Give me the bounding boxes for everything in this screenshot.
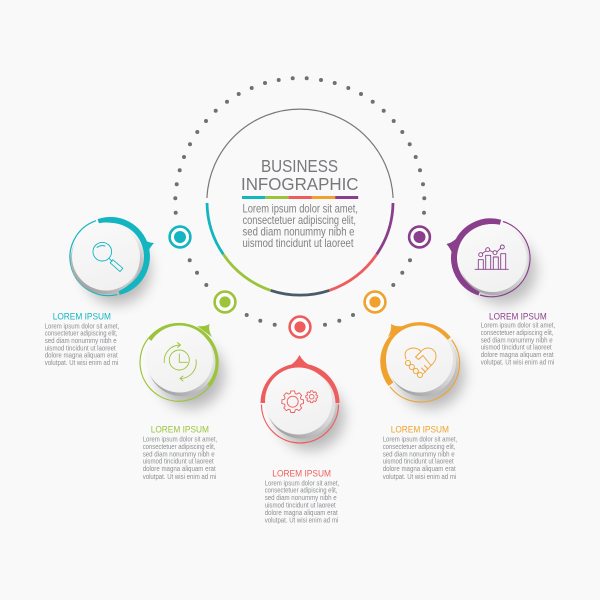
label: orange: uismod tincidunt ut laoreet [383,457,454,466]
card: teal search [70,220,154,304]
title [241,156,358,194]
label: teal: LOREM IPSUM [53,311,111,322]
label: green: Lorem ipsum dolor sit amet, [143,435,217,444]
label: red: uismod tincidunt ut laoreet [265,501,336,510]
label: orange: sed diam nonummy nibh e [383,449,455,458]
central text: consectetuer adipiscing elit, [242,213,356,227]
label: green: consectetuer adipiscing elit, [143,442,215,451]
label: red: dolore magna aliquam erat [265,508,338,517]
node: teal [170,227,190,247]
label: green: volutpat. Ut wisi enim ad mi [143,472,217,481]
node: red [290,317,310,337]
label: teal: Lorem ipsum dolor sit amet, [45,321,119,330]
label: green: uismod tincidunt ut laoreet [143,457,214,466]
label: purple: dolore magna aliquam erat [481,350,554,359]
label: green [143,425,217,481]
label: green: LOREM IPSUM [151,425,209,436]
title: BUSINESS [261,156,338,176]
label: red: consectetuer adipiscing elit, [265,486,337,495]
label: teal: volutpat. Ut wisi enim ad mi [45,358,119,367]
icon: handshake [405,348,436,378]
node: purple [409,227,430,247]
colour bar [242,196,358,199]
card: orange handshake [383,324,464,408]
label: purple: consectetuer adipiscing elit, [481,328,553,337]
title: INFOGRAPHIC [241,174,358,194]
card: red gears [262,355,344,450]
label: red: sed diam nonummy nibh e [265,493,337,502]
card: green clock [140,324,224,408]
icon: gears [282,391,318,413]
central text [242,202,358,250]
label: orange: volutpat. Ut wisi enim ad mi [383,472,457,481]
label: red: Lorem ipsum dolor sit amet, [265,478,339,487]
label: teal: consectetuer adipiscing elit, [45,329,117,338]
label: green: dolore magna aliquam erat [143,464,216,473]
label: purple: uismod tincidunt ut laoreet [481,343,552,352]
label: teal: uismod tincidunt ut laoreet [45,343,116,352]
label: orange: Lorem ipsum dolor sit amet, [383,435,457,444]
label: purple: volutpat. Ut wisi enim ad mi [481,358,555,367]
central text: sed diam nonummy nibh e [242,224,355,238]
label: orange: LOREM IPSUM [391,425,449,436]
label: orange [383,425,457,481]
label: green: sed diam nonummy nibh e [143,449,215,458]
label: red: LOREM IPSUM [272,468,331,479]
label: orange: consectetuer adipiscing elit, [383,442,455,451]
icon: bar chart [475,245,508,269]
label: red: volutpat. Ut wisi enim ad mi [265,515,339,524]
label: purple: sed diam nonummy nibh e [481,335,553,344]
label: teal [45,311,119,367]
icon: clock [164,342,196,381]
label: orange: dolore magna aliquam erat [383,464,456,473]
node: orange [365,292,385,312]
label: teal: sed diam nonummy nibh e [45,336,117,345]
label: teal: dolore magna aliquam erat [45,351,118,360]
dotted ring [173,76,426,327]
label: purple: Lorem ipsum dolor sit amet, [481,321,555,330]
label: purple [481,311,555,367]
label: red [265,468,339,524]
central text: uismod tincidunt ut laoreet [242,236,354,250]
card: purple chart [446,221,536,304]
central text: Lorem ipsum dolor sit amet, [242,202,358,216]
node: green [215,292,235,312]
central circle outline [207,109,393,295]
icon: magnifier [93,242,123,272]
label: purple: LOREM IPSUM [489,311,547,322]
